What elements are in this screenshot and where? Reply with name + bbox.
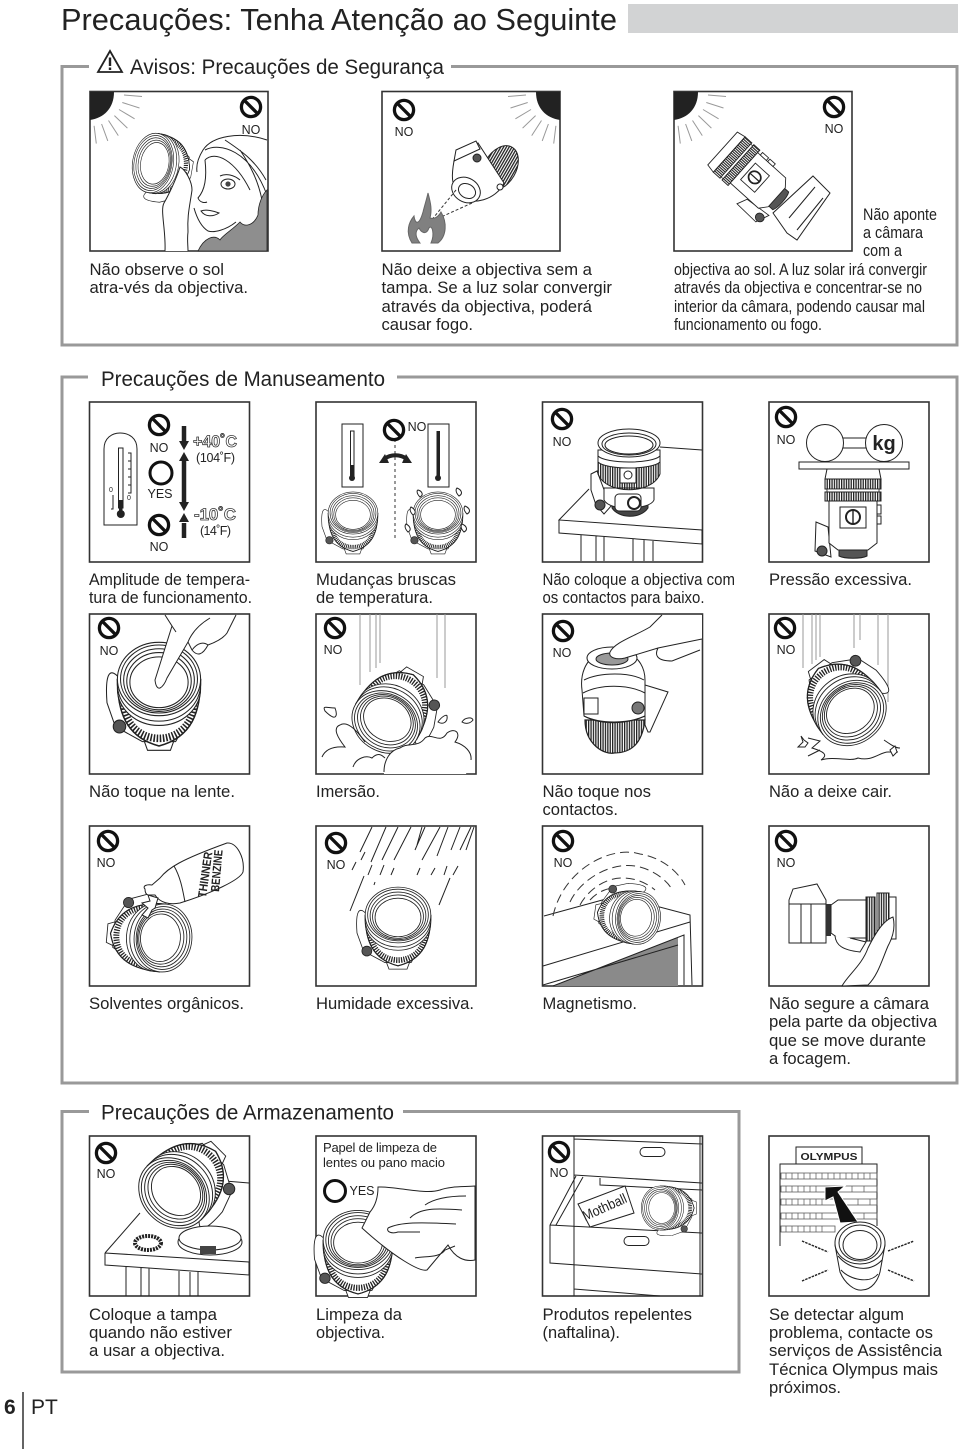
caption bbox=[316, 571, 456, 607]
illustration: excessive pressure: kg bbox=[872, 433, 896, 455]
icon: prohibited bbox=[325, 618, 345, 638]
icon: prohibited bbox=[99, 618, 119, 638]
caption: pela parte da objectiva bbox=[769, 1013, 938, 1031]
caption: contactos. bbox=[542, 801, 618, 819]
heading: safety warnings: Avisos: Precauções de Segurança bbox=[130, 56, 444, 79]
caption bbox=[90, 261, 248, 297]
illustration: do not point camera at sun bbox=[674, 92, 852, 251]
caption: a focagem. bbox=[769, 1050, 851, 1068]
illustration: attach the cap bbox=[90, 1122, 252, 1296]
caption: Mudanças bruscas bbox=[316, 571, 456, 589]
illustration: do not stand on contacts: NO bbox=[553, 435, 572, 449]
illustration: cleaning the lens: YES bbox=[349, 1184, 375, 1198]
arrows: temperature range bbox=[182, 426, 186, 538]
caption: Humidade excessiva. bbox=[316, 995, 474, 1013]
arrow: to building bbox=[825, 1186, 858, 1223]
caption: próximos. bbox=[769, 1379, 841, 1397]
illustration: operating temperature range: 0 bbox=[127, 495, 131, 502]
illustration: do not stand on contacts bbox=[542, 402, 702, 562]
icon: prohibited bbox=[553, 831, 573, 851]
caption: condensed text: interior da câmara, podendo causar mal bbox=[674, 298, 925, 316]
panel: storage precautions bbox=[62, 1102, 739, 1372]
illustration: do not touch contacts: NO bbox=[553, 646, 572, 660]
caption: Se detectar algum bbox=[769, 1306, 904, 1324]
splash bbox=[322, 707, 473, 774]
caption: Solventes orgânicos. bbox=[89, 995, 244, 1013]
illustration: do not touch the lens: NO bbox=[100, 644, 119, 658]
icon: prohibited bbox=[384, 420, 404, 440]
caption: tampa. Se a luz solar convergir bbox=[382, 279, 612, 297]
caption: Não observe o sol bbox=[90, 261, 224, 279]
illustration: excessive pressure bbox=[769, 402, 929, 562]
icon: prohibited bbox=[326, 833, 346, 853]
icon: prohibited bbox=[241, 97, 261, 117]
illustration: operating temperature range: YES bbox=[147, 487, 173, 501]
illustration: operating temperature range: NO bbox=[150, 540, 169, 554]
sign: Olympus bbox=[796, 1147, 862, 1164]
icon: allowed bbox=[150, 462, 172, 484]
panel: safety warnings bbox=[62, 51, 957, 345]
icon: prohibited bbox=[776, 831, 796, 851]
sign: Olympus: OLYMPUS bbox=[800, 1151, 858, 1163]
illustration: excessive humidity bbox=[316, 826, 476, 986]
caption bbox=[542, 783, 651, 819]
caption: quando não estiver bbox=[89, 1324, 233, 1342]
caption: os contactos para baixo. bbox=[542, 589, 704, 607]
caption bbox=[89, 571, 252, 607]
illustration: repellents: NO bbox=[550, 1166, 569, 1180]
illustration: magnetism bbox=[542, 826, 702, 986]
illustration: cleaning the lens: Papel de limpeza de bbox=[323, 1140, 437, 1155]
icon: prohibited bbox=[149, 415, 169, 435]
caption: Limpeza da bbox=[316, 1306, 403, 1324]
caption: Não toque na lente. bbox=[89, 783, 235, 801]
caption: (naftalina). bbox=[542, 1324, 620, 1342]
illustration: operating temperature range bbox=[90, 402, 250, 562]
footer: page number: PT bbox=[31, 1396, 58, 1419]
illustration: operating temperature range: NO bbox=[150, 441, 169, 455]
lens: dry bbox=[322, 492, 378, 554]
panel: handling precautions bbox=[62, 368, 957, 1083]
illustration: do not touch contacts bbox=[542, 614, 702, 774]
caption: Não toque nos bbox=[542, 783, 651, 801]
illustration: excessive pressure: NO bbox=[777, 433, 796, 447]
heading: handling: Precauções de Manuseamento bbox=[101, 368, 385, 391]
caption: Produtos repelentes bbox=[542, 1306, 692, 1324]
caption: através da objectiva, poderá bbox=[382, 298, 593, 316]
caption: que se move durante bbox=[769, 1032, 926, 1050]
illustration: immersion bbox=[316, 614, 476, 774]
caption: Não segure a câmara bbox=[769, 995, 930, 1013]
illustration: operating temperature range: (104˚F) bbox=[196, 451, 235, 465]
caption: Técnica Olympus mais bbox=[769, 1361, 938, 1379]
footer: page number: 6 bbox=[4, 1396, 16, 1419]
title bar bbox=[628, 4, 958, 33]
illustration: magnetism: NO bbox=[554, 856, 573, 870]
icon: prohibited bbox=[775, 618, 795, 638]
illustration: lens without cap, fire: NO bbox=[395, 125, 414, 139]
illustration: operating temperature range: +40˚C bbox=[193, 432, 237, 451]
illustration: operating temperature range: 0 bbox=[109, 487, 113, 494]
caption bbox=[316, 1306, 403, 1342]
illustration: excessive humidity: NO bbox=[327, 858, 346, 872]
icon: allowed bbox=[324, 1180, 346, 1202]
caption: causar fogo. bbox=[382, 316, 473, 334]
illustration: lens without cap, fire bbox=[382, 92, 560, 251]
caption: atra-vés da objectiva. bbox=[90, 279, 248, 297]
illustration: organic solvents: NO bbox=[97, 856, 116, 870]
caption: Magnetismo. bbox=[542, 995, 637, 1013]
caption bbox=[769, 1306, 943, 1397]
illustration: immersion: NO bbox=[324, 643, 343, 657]
caption: de temperatura. bbox=[316, 589, 433, 607]
lens: condensation bbox=[407, 492, 463, 554]
caption bbox=[769, 995, 938, 1068]
illustration: sudden temperature changes: NO bbox=[408, 420, 427, 434]
illustration: operating temperature range: -10˚C bbox=[194, 505, 236, 524]
illustration: sudden temperature changes bbox=[316, 402, 476, 562]
icon: warning triangle bbox=[98, 51, 122, 72]
illustration: attach the cap: NO bbox=[97, 1167, 116, 1181]
caption bbox=[89, 1306, 233, 1360]
caption: condensed text bbox=[674, 206, 937, 334]
illustration: do not hold the moving part of the lens: NO bbox=[777, 856, 796, 870]
arrow: two-way bbox=[384, 455, 407, 459]
illustration: cleaning the lens: lentes ou pano macio bbox=[323, 1155, 445, 1170]
lens on table bbox=[591, 429, 660, 516]
caption: Amplitude de tempera- bbox=[89, 571, 250, 589]
caption: condensed text: com a bbox=[863, 242, 903, 260]
caption: Pressão excessiva. bbox=[769, 571, 912, 589]
illustration: do not look at the sun bbox=[90, 92, 268, 251]
illustration: do not touch the lens bbox=[90, 614, 250, 774]
caption: condensed text: objectiva ao sol. A luz solar irá convergir bbox=[674, 261, 927, 279]
illustration: cleaning the lens bbox=[314, 1136, 476, 1297]
icon: prohibited bbox=[824, 97, 844, 117]
icon: flames bbox=[408, 193, 445, 243]
illustration: do not drop bbox=[769, 614, 929, 774]
illustration: operating temperature range: (14˚F) bbox=[200, 524, 231, 538]
paper: mothball: Mothball bbox=[580, 1190, 629, 1224]
icon: prohibited bbox=[553, 621, 573, 641]
icon: prohibited bbox=[552, 409, 572, 429]
illustration: contact Olympus service bbox=[769, 1136, 929, 1296]
icon: prohibited bbox=[96, 1143, 116, 1163]
bottle: thinner: THINNER bbox=[195, 851, 215, 898]
illustration: repellents bbox=[542, 1136, 702, 1296]
caption: condensed text: Não aponte bbox=[863, 206, 937, 224]
icon: prohibited bbox=[149, 515, 169, 535]
caption: Não deixe a objectiva sem a bbox=[382, 261, 593, 279]
icon: prohibited bbox=[776, 407, 796, 427]
illustration: organic solvents bbox=[90, 826, 250, 986]
caption: condensed text: através da objectiva e concentrar-se no bbox=[674, 279, 922, 297]
caption: problema, contacte os bbox=[769, 1324, 933, 1342]
caption: a usar a objectiva. bbox=[89, 1342, 225, 1360]
caption: tura de funcionamento. bbox=[89, 589, 252, 607]
caption: condensed text: funcionamento ou fogo. bbox=[674, 316, 822, 334]
caption: Imersão. bbox=[316, 783, 380, 801]
footer: page number bbox=[4, 1392, 58, 1449]
finger bbox=[610, 615, 702, 661]
rear cap bbox=[135, 1236, 161, 1250]
heading: storage: Precauções de Armazenamento bbox=[101, 1102, 394, 1124]
caption bbox=[382, 261, 612, 334]
caption bbox=[542, 1306, 692, 1342]
icon: prohibited bbox=[394, 100, 414, 120]
caption: objectiva. bbox=[316, 1324, 385, 1342]
illustration: do not look at the sun: NO bbox=[242, 123, 261, 137]
illustration: do not hold the moving part of the lens bbox=[769, 826, 929, 986]
front cap bbox=[178, 1226, 242, 1255]
caption: Não coloque a objectiva com bbox=[542, 571, 735, 589]
caption: condensed text: a câmara bbox=[863, 224, 924, 242]
title: Precauções: Tenha Atenção ao Seguinte bbox=[61, 2, 617, 37]
icon: prohibited bbox=[98, 831, 118, 851]
caption: serviços de Assistência bbox=[769, 1342, 943, 1360]
icon: prohibited bbox=[549, 1142, 569, 1162]
illustration: do not drop: NO bbox=[777, 643, 796, 657]
caption: Coloque a tampa bbox=[89, 1306, 218, 1324]
caption: Não a deixe cair. bbox=[769, 783, 892, 801]
bottle: thinner: BENZINE bbox=[208, 849, 226, 892]
caption bbox=[542, 571, 735, 607]
illustration: do not point camera at sun: NO bbox=[825, 122, 844, 136]
bottle: thinner bbox=[144, 843, 243, 904]
